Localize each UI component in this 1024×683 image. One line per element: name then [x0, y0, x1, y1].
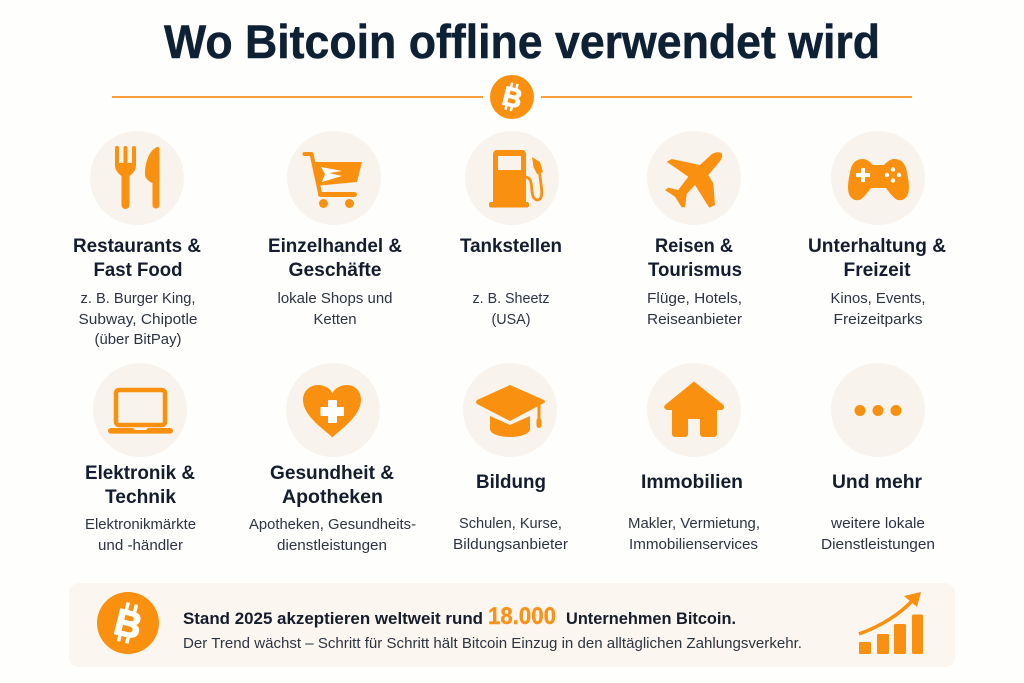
- statement headline: Stand 2025 akzeptieren weltweit rund: [183, 609, 483, 628]
- panel: and more: [821, 363, 935, 553]
- description: Dienstleistungen: [821, 537, 935, 553]
- heading: Restaurants &: [73, 235, 201, 257]
- description: (USA): [492, 312, 530, 328]
- heading: Einzelhandel &: [268, 235, 402, 257]
- description: Kinos, Events,: [830, 291, 926, 307]
- description: Ketten: [314, 312, 356, 328]
- description: Subway, Chipotle: [78, 312, 198, 328]
- panel: real estate: [628, 363, 760, 553]
- icon: bitcoin coin large: [97, 592, 159, 654]
- panel: electronics: [85, 363, 196, 554]
- description: Apotheken, Gesundheits-: [249, 517, 416, 533]
- icon: heart with cross: [286, 363, 380, 457]
- icon: graduation cap: [463, 363, 557, 457]
- icon: bitcoin coin large: B: [110, 601, 146, 647]
- description: (über BitPay): [94, 332, 182, 348]
- icon: laptop: [93, 363, 187, 457]
- heading: Bildung: [476, 471, 546, 493]
- heading: Technik: [105, 486, 176, 508]
- heading: Freizeit: [844, 259, 911, 281]
- heading: Geschäfte: [288, 259, 382, 281]
- heading: Unterhaltung &: [808, 235, 946, 257]
- description: z. B. Sheetz: [472, 291, 550, 307]
- panel: health: [249, 363, 416, 554]
- icon: bitcoin coin small: B: [499, 81, 525, 115]
- panel: education: [453, 363, 568, 553]
- heading: Fast Food: [94, 259, 182, 281]
- description: dienstleistungen: [277, 538, 387, 554]
- description: Schulen, Kurse,: [459, 516, 562, 532]
- panel: retail: [268, 131, 402, 328]
- heading: Reisen &: [655, 235, 733, 257]
- description: und -händler: [98, 538, 183, 554]
- title: Wo Bitcoin offline verwendet wird: [164, 15, 880, 68]
- panel: restaurants: [73, 131, 201, 348]
- heading: Tourismus: [648, 259, 742, 281]
- description: lokale Shops und: [278, 291, 392, 307]
- header divider with bitcoin coin: [112, 75, 912, 119]
- icon: house: [647, 363, 741, 457]
- icon: game controller: [831, 131, 925, 225]
- panel: travel: [647, 131, 742, 328]
- icon: shopping cart: [287, 131, 381, 225]
- heading: Tankstellen: [460, 235, 562, 257]
- heading: Und mehr: [832, 471, 922, 493]
- description: z. B. Burger King,: [80, 291, 196, 307]
- icon: bitcoin coin small: [490, 75, 534, 119]
- description: Flüge, Hotels,: [647, 291, 742, 307]
- description: Freizeitparks: [834, 312, 922, 328]
- description: Immobilienservices: [629, 537, 758, 553]
- icon: fuel pump: [465, 131, 559, 225]
- panel: entertainment: [808, 131, 946, 328]
- icon: fork and knife: [90, 131, 184, 225]
- description: weitere lokale: [830, 516, 925, 532]
- heading: Immobilien: [641, 471, 743, 493]
- description: Reiseanbieter: [647, 312, 742, 328]
- heading: Gesundheit &: [270, 462, 394, 484]
- statement subline: Der Trend wächst – Schritt für Schritt hält Bitcoin Einzug in den alltäglichen Zahlungsverkehr.: [183, 635, 802, 652]
- icon: three dots: [831, 363, 925, 457]
- description: Makler, Vermietung,: [628, 516, 760, 532]
- statement headline: 18.000: [488, 603, 556, 630]
- panel: gas stations: [460, 131, 562, 328]
- heading: Apotheken: [282, 486, 383, 508]
- icon: airplane: [647, 131, 741, 225]
- icon: growth chart with arrow: [859, 592, 923, 654]
- description: Bildungsanbieter: [453, 537, 568, 553]
- heading: Elektronik &: [85, 462, 195, 484]
- panel: bottom summary band: [69, 583, 955, 667]
- statement headline: Unternehmen Bitcoin.: [566, 609, 736, 628]
- description: Elektronikmärkte: [85, 517, 196, 533]
